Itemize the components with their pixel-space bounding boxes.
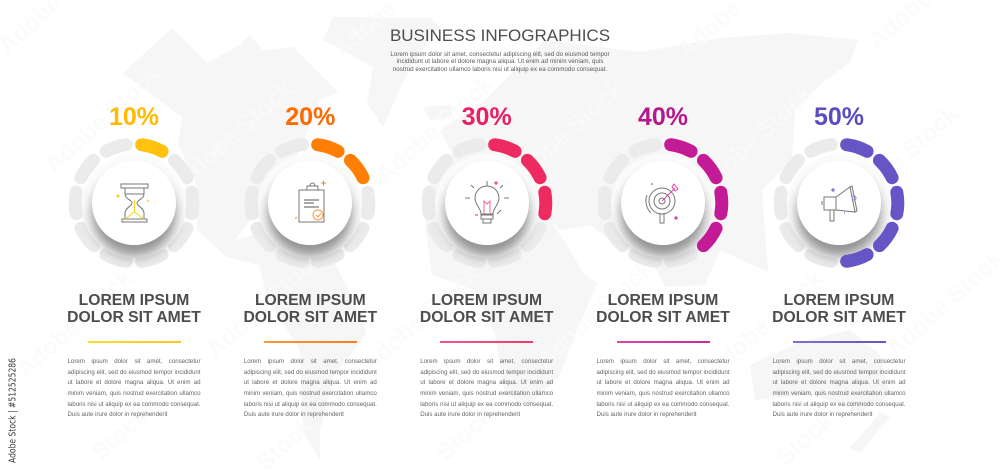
- percent label: 30%: [462, 102, 512, 130]
- body text: [244, 358, 377, 418]
- body text: adipiscing elit, sed do eiusmod tempor incididunt: [68, 369, 200, 376]
- watermarks: Stock: [772, 407, 839, 471]
- percent label: 50%: [814, 102, 864, 130]
- divider line: [264, 341, 357, 342]
- body text: ut labore et dolore magna aliqua. Ut enim ad: [772, 379, 906, 386]
- icon: light bulb: [465, 181, 509, 223]
- progress ring: [774, 138, 904, 268]
- body text: Lorem ipsum dolor sit amet, consectetur: [68, 358, 200, 365]
- watermarks: Adobe Stock: [501, 75, 629, 194]
- body text: adipiscing elit, sed do eiusmod tempor incididunt: [244, 369, 377, 376]
- body text: Lorem ipsum dolor sit amet, consectetur: [420, 358, 553, 365]
- icon: hourglass: [116, 184, 149, 222]
- heading: [67, 292, 201, 326]
- body text: minim veniam, quis nostrud exercitation ullamco: [596, 390, 730, 397]
- subtitle: [390, 50, 610, 73]
- heading: DOLOR SIT AMET: [772, 309, 906, 326]
- watermarks: Adobe Stock: [531, 255, 659, 374]
- heading: [243, 292, 377, 326]
- subtitle: nostrud exercitation ullamco laboris nisi ut aliquip ex ea commodo consequat.: [393, 66, 607, 73]
- iceland: [423, 105, 453, 120]
- watermarks: Stock: [87, 402, 154, 466]
- body text: [420, 358, 554, 418]
- heading: [420, 292, 554, 326]
- body text: Lorem ipsum dolor sit amet, consectetur: [772, 358, 906, 365]
- north america: [123, 28, 347, 287]
- body text: [596, 358, 730, 418]
- watermarks: Adobe Stock: [836, 100, 964, 219]
- progress ring: [245, 138, 376, 268]
- body text: ut labore et dolore magna aliqua. Ut enim ad: [596, 379, 730, 386]
- watermarks: Adobe Stock: [371, 70, 499, 189]
- body text: adipiscing elit, sed do eiusmod tempor incididunt: [772, 369, 906, 376]
- eurasia: [440, 33, 858, 287]
- body text: minim veniam, quis nostrud exercitation ullamco: [244, 390, 377, 397]
- progress ring: [68, 138, 199, 268]
- body text: laboris nisi ut aliquip ex ea commodo consequat.: [596, 401, 730, 408]
- watermarks: Adobe Stock: [356, 260, 484, 379]
- body text: laboris nisi ut aliquip ex ea commodo consequat.: [772, 401, 906, 408]
- heading: [596, 292, 730, 326]
- watermarks: Adobe Stock: [201, 245, 329, 364]
- australia: [750, 330, 890, 412]
- body text: adipiscing elit, sed do eiusmod tempor incididunt: [420, 369, 553, 376]
- body text: Duis aute irure dolor in reprehenderit: [244, 411, 344, 418]
- watermarks: Adobe Stock: [701, 265, 829, 384]
- heading: LOREM IPSUM: [784, 292, 894, 309]
- body text: [68, 358, 200, 418]
- watermarks: Adobe Stock: [39, 60, 167, 179]
- heading: LOREM IPSUM: [79, 292, 189, 309]
- panel: 20%: [243, 102, 377, 418]
- icon: clipboard: [295, 180, 326, 222]
- percent label: 40%: [638, 102, 688, 130]
- africa: [425, 135, 597, 405]
- icon: megaphone: [822, 186, 857, 221]
- heading: LOREM IPSUM: [608, 292, 718, 309]
- watermarks: Adobe Stock: [11, 265, 139, 384]
- divider line: [88, 341, 180, 342]
- heading: [772, 292, 906, 326]
- heading: LOREM IPSUM: [255, 292, 366, 309]
- percent label: 20%: [285, 102, 335, 130]
- divider line: [440, 341, 533, 342]
- body text: ut labore et dolore magna aliqua. Ut enim ad: [244, 379, 377, 386]
- progress ring: [598, 138, 728, 268]
- watermarks: Adobe Stock: [171, 75, 299, 194]
- body text: Duis aute irure dolor in reprehenderit: [68, 411, 168, 418]
- body text: minim veniam, quis nostrud exercitation ullamco: [68, 390, 200, 397]
- body text: Duis aute irure dolor in reprehenderit: [420, 411, 520, 418]
- panel: 10%: [67, 102, 808, 418]
- panel: 40%: [596, 102, 730, 418]
- body text: minim veniam, quis nostrud exercitation ullamco: [420, 390, 553, 397]
- body text: Lorem ipsum dolor sit amet, consectetur: [244, 358, 377, 365]
- heading: DOLOR SIT AMET: [243, 309, 377, 326]
- heading: LOREM IPSUM: [431, 292, 542, 309]
- body text: Lorem ipsum dolor sit amet, consectetur: [596, 358, 730, 365]
- percent label: 10%: [109, 102, 159, 130]
- body text: Duis aute irure dolor in reprehenderit: [596, 411, 697, 418]
- divider line: [792, 341, 886, 342]
- body text: laboris nisi ut aliquip ex ea commodo consequat.: [244, 401, 377, 408]
- body text: laboris nisi ut aliquip ex ea commodo consequat.: [420, 401, 553, 408]
- watermarks: Adobe Stock: [691, 80, 819, 199]
- shared gradients and shadows: [0, 0, 6, 6]
- body text: [772, 358, 906, 418]
- new zealand: [850, 413, 890, 453]
- body text: adipiscing elit, sed do eiusmod tempor incididunt: [596, 369, 730, 376]
- panel: 50%: [772, 102, 906, 418]
- divider line: [616, 341, 710, 342]
- subtitle: Lorem ipsum dolor sit amet, consectetur adipiscing elit, sed do eiusmod tempor: [390, 50, 610, 58]
- body text: ut labore et dolore magna aliqua. Ut enim ad: [68, 379, 200, 386]
- title: BUSINESS INFOGRAPHICS: [390, 26, 610, 45]
- body text: laboris nisi ut aliquip ex ea commodo consequat.: [68, 401, 200, 408]
- body text: ut labore et dolore magna aliqua. Ut enim ad: [420, 379, 553, 386]
- south america: [258, 262, 367, 460]
- greenland: [323, 17, 440, 127]
- heading: DOLOR SIT AMET: [67, 309, 201, 326]
- subtitle: incididunt ut labore et dolore magna aliqua. Ut enim ad minim veniam, quis: [397, 58, 603, 65]
- body text: Duis aute irure dolor in reprehenderit: [772, 411, 873, 418]
- heading: DOLOR SIT AMET: [596, 309, 730, 326]
- heading: DOLOR SIT AMET: [420, 309, 554, 326]
- icon: target: [646, 184, 678, 223]
- watermarks: Stock: [432, 402, 499, 466]
- progress ring: [422, 138, 552, 268]
- panel: 30%: [420, 102, 554, 418]
- body text: minim veniam, quis nostrud exercitation ullamco: [772, 390, 906, 397]
